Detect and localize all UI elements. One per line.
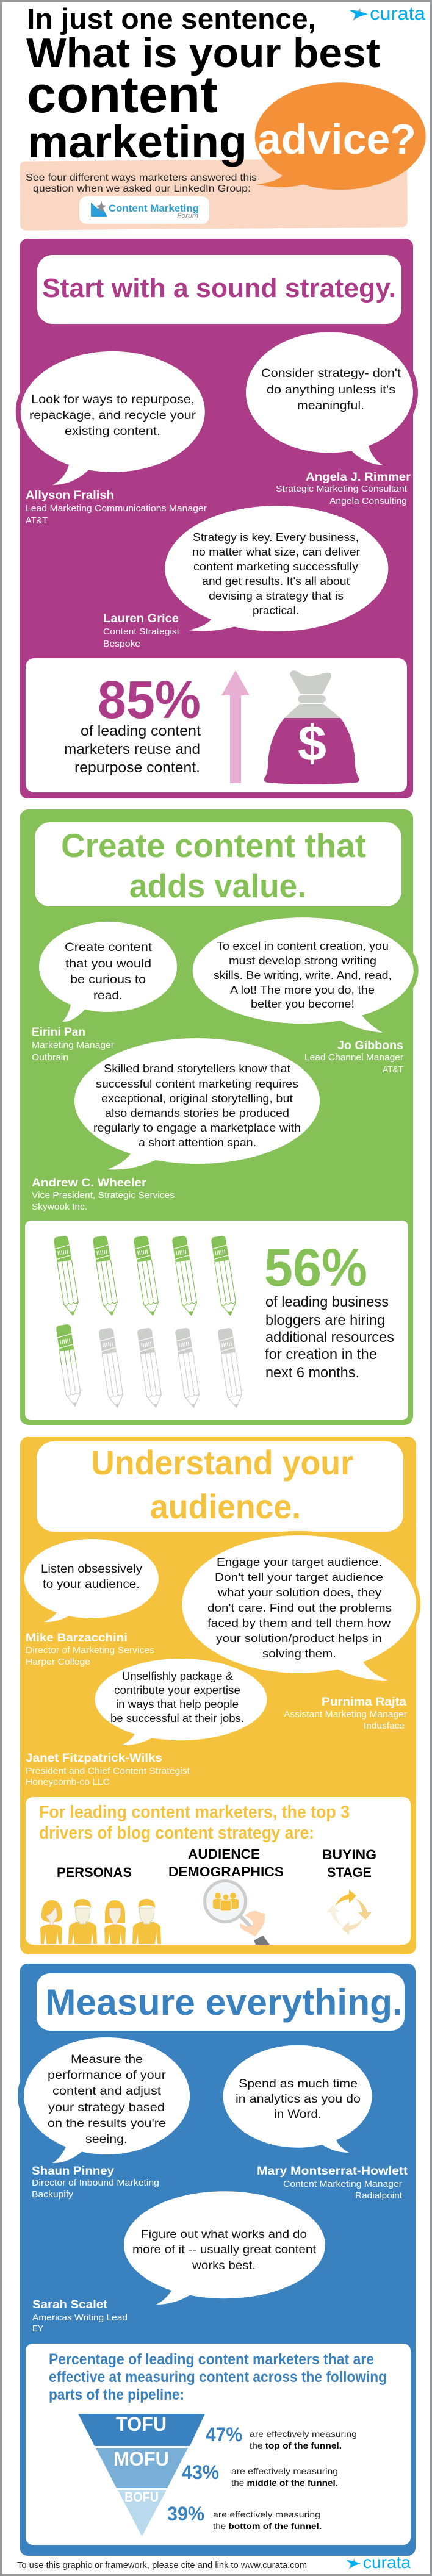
attribution: Sarah Scalet: EY <box>32 2323 43 2334</box>
quote: Andrew C. Wheeler: exceptional, original storytelling, but <box>101 1092 293 1105</box>
panel: intro peach box <box>20 158 408 231</box>
label: buying stage: BUYING <box>322 1847 376 1862</box>
stat: 47 percent top of funnel: 47% <box>206 2424 242 2445</box>
quote: Purnima Rajta: solving them. <box>262 1648 336 1660</box>
quote: Angela J. Rimmer: Consider strategy- don't <box>261 367 401 380</box>
attribution: Sarah Scalet: Sarah Scalet <box>32 2298 108 2311</box>
quote: Lauren Grice: Strategy is key. Every business, <box>193 531 359 544</box>
heading: create content that adds value <box>35 822 401 906</box>
attribution: Purnima Rajta <box>284 1696 407 1731</box>
heading: create content that adds value: adds value. <box>129 867 306 905</box>
attribution: Sarah Scalet: Americas Writing Lead <box>32 2312 128 2323</box>
stat: 56 percent: next 6 months. <box>265 1365 359 1381</box>
callout: advice speech bubble <box>255 82 426 190</box>
stat: 56 percent: bloggers are hiring <box>265 1312 385 1329</box>
label: personas: PERSONAS <box>57 1865 132 1880</box>
label: audience demographics: DEMOGRAPHICS <box>168 1864 284 1879</box>
quote: Janet Fitzpatrick-Wilks: contribute your expertise <box>114 1684 240 1696</box>
attribution: Jo Gibbons: AT&T <box>383 1064 403 1075</box>
icon: money bag: $ <box>298 715 326 772</box>
icon: money bag <box>264 670 359 784</box>
stat box: 85% <box>26 658 407 792</box>
quote: Shaun Pinney <box>24 2037 190 2163</box>
stat box: top 3 drivers <box>26 1797 411 1945</box>
stat box: 56% <box>25 1221 408 1420</box>
stat: 56 percent: 56% <box>264 1238 367 1297</box>
quote: Purnima Rajta: what your solution does, they <box>217 1587 381 1599</box>
title: marketing <box>27 117 247 167</box>
quote: Janet Fitzpatrick-Wilks: in ways that help people <box>116 1698 239 1710</box>
attribution: Lauren Grice: Bespoke <box>103 639 140 649</box>
quote: Janet Fitzpatrick-Wilks: Unselfishly package & <box>122 1670 233 1682</box>
attribution: Sarah Scalet <box>32 2298 128 2334</box>
panel: create content that adds value <box>20 809 414 1425</box>
icon: buying stage cycle <box>326 1890 372 1935</box>
quote: Janet Fitzpatrick-Wilks: be successful at their jobs. <box>110 1712 244 1724</box>
quote: Mary Montserrat-Howlett: Spend as much time <box>239 2078 358 2090</box>
quote: Mike Barzacchini <box>24 1539 159 1622</box>
callout: advice speech bubble: advice? <box>257 115 416 163</box>
title: What is your best <box>26 30 380 76</box>
attribution: Andrew C. Wheeler: Andrew C. Wheeler <box>32 1177 147 1189</box>
attribution: Purnima Rajta: Purnima Rajta <box>322 1696 406 1709</box>
attribution: Eirini Pan: Marketing Manager <box>32 1040 114 1050</box>
attribution: Janet Fitzpatrick-Wilks: President and Chief Content Strategist <box>26 1766 190 1776</box>
attribution: Allyson Fralish <box>26 489 207 526</box>
title: content <box>27 66 218 123</box>
quote: Lauren Grice: no matter what size, can deliver <box>192 546 360 558</box>
attribution: Allyson Fralish: AT&T <box>26 515 48 526</box>
subheading: percentage of marketers: Percentage of leading content marketers that are <box>49 2351 374 2368</box>
quote: Jo Gibbons: A lot! The more you do, the <box>230 984 375 996</box>
quote: Jo Gibbons: must develop strong writing <box>229 955 376 967</box>
quote: Lauren Grice: content marketing successfully <box>193 561 358 573</box>
attribution: Shaun Pinney: Director of Inbound Marketing <box>32 2178 159 2188</box>
stat: 43 percent middle of funnel <box>182 2461 338 2488</box>
heading: understand your audience: audience. <box>150 1487 301 1526</box>
attribution: Lauren Grice: Lauren Grice <box>103 612 179 625</box>
stat: 43 percent middle of funnel: are effectively measuring <box>231 2466 338 2476</box>
subheading: percentage of marketers: effective at measuring content across the following <box>49 2369 387 2386</box>
chart: funnel: BOFU <box>124 2489 159 2505</box>
title <box>26 2 380 167</box>
quote: Purnima Rajta: Engage your target audience. <box>217 1556 382 1568</box>
stat: 56 percent: of leading business <box>265 1294 389 1310</box>
stat: 85 percent <box>64 670 201 776</box>
quote: Jo Gibbons: better you become! <box>251 998 355 1010</box>
quote: Lauren Grice <box>165 506 388 631</box>
quote: Shaun Pinney: your strategy based <box>48 2101 165 2114</box>
quote: Purnima Rajta: faced by them and tell them how <box>207 1617 391 1629</box>
quote: Eirini Pan: read. <box>93 989 123 1002</box>
quote: Allyson Fralish: repackage, and recycle your <box>29 409 196 422</box>
quote: Andrew C. Wheeler: regularly to engage a marketplace with <box>93 1122 301 1134</box>
quote: Mary Montserrat-Howlett <box>223 2045 372 2153</box>
intro text <box>26 173 257 194</box>
quote: Allyson Fralish <box>21 351 205 485</box>
subheading: percentage of marketers: parts of the pipeline: <box>49 2386 184 2403</box>
attribution: Purnima Rajta: Indusface <box>364 1721 405 1731</box>
label: audience demographics <box>168 1846 284 1879</box>
stat: 85 percent: of leading content <box>81 723 201 739</box>
heading: create content that adds value: Create content that <box>61 827 366 864</box>
quote: Andrew C. Wheeler: a short attention span. <box>139 1136 256 1149</box>
icon: four personas <box>40 1899 161 1944</box>
heading: start with a sound strategy: Start with a sound strategy. <box>42 273 396 303</box>
quote: Lauren Grice: practical. <box>253 605 299 617</box>
subheading: top 3 drivers <box>39 1803 350 1843</box>
quote: Lauren Grice: devising a strategy that is <box>209 590 344 602</box>
attribution: Andrew C. Wheeler <box>32 1177 175 1212</box>
quote: Shaun Pinney: on the results you're <box>48 2117 166 2130</box>
stat box: funnel <box>26 2344 411 2545</box>
quote: Eirini Pan: Create content <box>65 941 153 954</box>
panel: understand your audience <box>20 1437 416 1954</box>
quote: Sarah Scalet: more of it -- usually great content <box>132 2244 317 2256</box>
quote: Jo Gibbons <box>193 917 414 1033</box>
attribution: Shaun Pinney: Backupify <box>32 2189 74 2200</box>
attribution: Mike Barzacchini: Director of Marketing Services <box>26 1645 154 1656</box>
attribution: Mike Barzacchini: Mike Barzacchini <box>26 1632 128 1645</box>
logo: content marketing forum <box>79 196 209 224</box>
attribution: Angela J. Rimmer: Strategic Marketing Consultant <box>276 484 408 494</box>
quote: Allyson Fralish: Look for ways to repurpose, <box>31 393 195 406</box>
panel: start with a sound strategy <box>20 239 413 798</box>
attribution: Shaun Pinney: Shaun Pinney <box>32 2165 114 2178</box>
stat: 56 percent: additional resources <box>265 1329 394 1346</box>
attribution: Purnima Rajta: Assistant Marketing Manager <box>284 1709 407 1720</box>
attribution: Lauren Grice: Content Strategist <box>103 626 180 637</box>
attribution: Mary Montserrat-Howlett: Mary Montserrat-Howlett <box>257 2165 408 2178</box>
quote: Purnima Rajta <box>182 1535 416 1681</box>
logo: content marketing forum: Forum <box>177 212 198 220</box>
label: audience demographics: AUDIENCE <box>188 1846 260 1862</box>
quote: Angela J. Rimmer <box>246 332 413 465</box>
attribution: Angela J. Rimmer <box>276 471 411 506</box>
quote: Purnima Rajta: don't care. Find out the problems <box>207 1602 392 1614</box>
heading: measure everything <box>37 1973 405 2031</box>
quote: Mike Barzacchini: Listen obsessively <box>41 1563 143 1576</box>
stat: 39 percent bottom of funnel: 39% <box>167 2503 204 2525</box>
quote: Jo Gibbons: To excel in content creation, you <box>217 940 389 952</box>
quote: Allyson Fralish: existing content. <box>65 425 160 438</box>
quote: Andrew C. Wheeler: successful content marketing requires <box>96 1078 298 1090</box>
subheading: top 3 drivers: For leading content marketers, the top 3 <box>39 1803 350 1822</box>
intro text: question when we asked our LinkedIn Group: <box>33 184 251 194</box>
chart: funnel <box>78 2413 205 2536</box>
heading: understand your audience: Understand your <box>91 1443 353 1482</box>
heading: understand your audience <box>37 1441 403 1532</box>
quote: Jo Gibbons: skills. Be writing, write. And, read, <box>214 969 392 981</box>
attribution: Mike Barzacchini: Harper College <box>26 1657 90 1667</box>
chart: funnel: TOFU <box>116 2413 167 2435</box>
label: buying stage <box>322 1847 376 1880</box>
quote: Sarah Scalet <box>124 2191 325 2305</box>
stat: 56 percent <box>264 1238 394 1381</box>
quote: Eirini Pan: be curious to <box>70 974 146 986</box>
attribution: Janet Fitzpatrick-Wilks: Honeycomb-co LLC <box>26 1777 110 1787</box>
attribution: Eirini Pan: Eirini Pan <box>32 1026 85 1039</box>
quote: Mary Montserrat-Howlett: in Word. <box>274 2108 322 2121</box>
quote: Mary Montserrat-Howlett: in analytics as you do <box>236 2093 361 2106</box>
attribution: Angela J. Rimmer: Angela Consulting <box>329 496 407 506</box>
attribution: Shaun Pinney <box>32 2165 159 2200</box>
intro text: See four different ways marketers answered this <box>26 173 257 183</box>
stat: 39 percent bottom of funnel: are effectively measuring <box>213 2510 320 2519</box>
subheading: percentage of marketers <box>49 2351 387 2403</box>
stat: 39 percent bottom of funnel <box>167 2503 322 2531</box>
attribution: Allyson Fralish: Lead Marketing Communications Manager <box>26 503 207 514</box>
stat: 47 percent top of funnel: the top of the funnel. <box>250 2441 342 2450</box>
chart: funnel: MOFU <box>113 2448 169 2470</box>
quote: Andrew C. Wheeler: Skilled brand storytellers know that <box>104 1063 290 1075</box>
label: buying stage: STAGE <box>327 1865 372 1880</box>
quote: Purnima Rajta: your solution/product helps in <box>216 1632 382 1645</box>
attribution: Jo Gibbons: Lead Channel Manager <box>304 1052 403 1063</box>
quote: Eirini Pan: that you would <box>65 958 151 970</box>
stat: 85 percent: marketers reuse and <box>64 741 200 758</box>
stat: 56 percent: for creation in the <box>265 1346 377 1363</box>
stat: 39 percent bottom of funnel: the bottom of the funnel. <box>213 2521 322 2531</box>
stat: 85 percent: 85% <box>98 670 201 730</box>
logo: curata top <box>349 4 425 24</box>
icon: magnifying glass over audience <box>205 1881 270 1945</box>
icon: pencil pictogram <box>53 1235 244 1409</box>
attribution: Mary Montserrat-Howlett: Content Marketing Manager <box>283 2179 402 2189</box>
quote: Shaun Pinney: Measure the <box>71 2053 143 2066</box>
quote: Angela J. Rimmer: meaningful. <box>297 400 364 412</box>
attribution: Mary Montserrat-Howlett: Radialpoint <box>355 2190 403 2201</box>
panel: measure everything <box>20 1964 416 2556</box>
heading: start with a sound strategy <box>37 255 401 324</box>
stat: 43 percent middle of funnel: 43% <box>182 2461 219 2483</box>
attribution: Eirini Pan <box>32 1026 114 1063</box>
stat: 43 percent middle of funnel: the middle of the funnel. <box>231 2478 338 2488</box>
stat: 47 percent top of funnel: are effectively measuring <box>250 2429 357 2439</box>
stat: 85 percent: repurpose content. <box>74 759 200 776</box>
attribution: Angela J. Rimmer: Angela J. Rimmer <box>306 471 411 484</box>
attribution: Mike Barzacchini <box>26 1632 154 1667</box>
attribution: Allyson Fralish: Allyson Fralish <box>26 489 114 502</box>
quote: Andrew C. Wheeler: also demands stories be produced <box>105 1107 289 1119</box>
attribution: Mary Montserrat-Howlett <box>257 2165 408 2201</box>
quote: Shaun Pinney: content and adjust <box>52 2085 162 2098</box>
stat: 47 percent top of funnel <box>206 2424 357 2450</box>
quote: Eirini Pan <box>39 922 177 1022</box>
attribution: Andrew C. Wheeler: Vice President, Strategic Services <box>32 1190 175 1200</box>
quote: Andrew C. Wheeler <box>74 1038 320 1169</box>
quote: Purnima Rajta: Don't tell your target audience <box>215 1571 383 1584</box>
icon: up arrow <box>221 670 250 783</box>
attribution: Janet Fitzpatrick-Wilks <box>26 1752 190 1787</box>
quote: Shaun Pinney: performance of your <box>48 2069 167 2082</box>
heading: measure everything: Measure everything. <box>45 1982 403 2023</box>
quote: Sarah Scalet: works best. <box>192 2259 256 2272</box>
footer citation: To use this graphic or framework, please cite and link to www.curata.com <box>17 2560 307 2571</box>
logo: curata bottom: curata <box>363 2553 411 2572</box>
attribution: Andrew C. Wheeler: Skywook Inc. <box>32 1202 87 1212</box>
quote: Mike Barzacchini: to your audience. <box>43 1578 140 1591</box>
quote: Shaun Pinney: seeing. <box>85 2133 128 2146</box>
quote: Sarah Scalet: Figure out what works and do <box>141 2228 307 2241</box>
quote: Lauren Grice: and get results. It's all about <box>202 575 350 587</box>
attribution: Jo Gibbons <box>304 1039 403 1075</box>
title: In just one sentence, <box>27 2 316 35</box>
quote: Janet Fitzpatrick-Wilks <box>95 1659 267 1745</box>
quote: Angela J. Rimmer: do anything unless it's <box>267 384 395 396</box>
attribution: Eirini Pan: Outbrain <box>32 1052 68 1063</box>
attribution: Lauren Grice <box>103 612 180 649</box>
subheading: top 3 drivers: drivers of blog content strategy are: <box>39 1823 314 1843</box>
logo: content marketing forum: Content Marketing <box>109 203 199 214</box>
attribution: Jo Gibbons: Jo Gibbons <box>337 1039 403 1052</box>
attribution: Janet Fitzpatrick-Wilks: Janet Fitzpatrick-Wilks <box>26 1752 162 1765</box>
logo: curata top: curata <box>370 4 425 24</box>
